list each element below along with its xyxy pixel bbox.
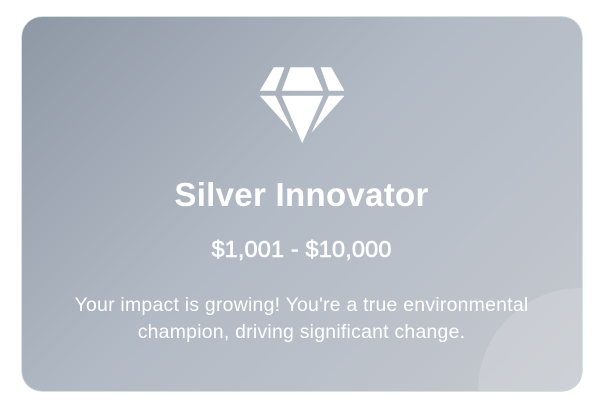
description [75, 294, 528, 343]
price range: $1,001 - $10,000 [211, 236, 392, 262]
title: Silver Innovator [174, 176, 429, 213]
icon: diamond [260, 67, 344, 143]
description: Your impact is growing! You're a true environmental [75, 294, 528, 316]
description: champion, driving significant change. [138, 321, 465, 343]
decorative corner circle [478, 288, 582, 391]
